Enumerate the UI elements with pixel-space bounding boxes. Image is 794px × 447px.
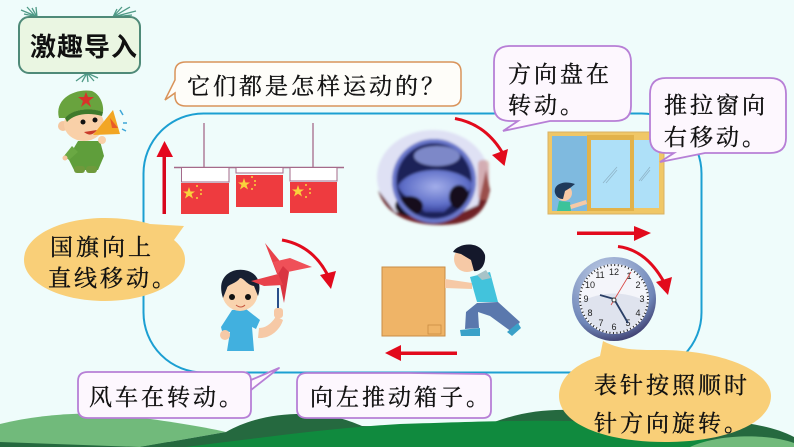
flag middle bbox=[236, 175, 283, 207]
title badge bbox=[19, 7, 140, 82]
speech bubble: clock bbox=[559, 341, 771, 442]
boy at window bbox=[555, 182, 587, 211]
clock: 11 bbox=[595, 270, 605, 280]
speech bubble: clock: 针方向旋转。 bbox=[594, 411, 750, 436]
cardboard box bbox=[382, 267, 445, 336]
arrow: wheel rotation bbox=[455, 118, 508, 166]
clock: 4 bbox=[635, 308, 641, 318]
speech bubble: window bbox=[650, 78, 786, 162]
speech bubble: clock: 表针按照顺时 bbox=[594, 373, 750, 398]
clock: 9 bbox=[583, 294, 589, 304]
title leaves bbox=[21, 7, 136, 82]
clock: 6 bbox=[611, 322, 617, 332]
speech bubble: steering wheel: 方向盘在 bbox=[508, 62, 612, 87]
speech bubble: pinwheel: 风车在转动。 bbox=[89, 385, 245, 410]
steering wheel photo bbox=[377, 130, 490, 225]
clock: 1 bbox=[626, 271, 632, 281]
clock: 5 bbox=[625, 318, 631, 328]
flag right bbox=[290, 182, 337, 213]
clock: 2 bbox=[635, 280, 641, 290]
motion loop frame bbox=[144, 114, 702, 372]
speech bubble: flag: 国旗向上 bbox=[50, 235, 154, 260]
arrow: clock rotation bbox=[618, 246, 672, 295]
speech bubble: box bbox=[297, 373, 492, 418]
title badge: 激趣导入 bbox=[30, 32, 138, 62]
clock bbox=[572, 257, 656, 341]
speech bubble: steering wheel bbox=[494, 46, 631, 131]
clock: 7 bbox=[598, 318, 604, 328]
speech bubble: pinwheel bbox=[78, 368, 279, 418]
clock: 8 bbox=[587, 308, 593, 318]
arrow: box moves left bbox=[385, 345, 457, 361]
speech bubble: flag bbox=[24, 218, 185, 301]
speech bubble: box: 向左推动箱子。 bbox=[310, 385, 492, 410]
clock: 12 bbox=[609, 267, 619, 277]
speech bubble: window: 推拉窗向 bbox=[664, 93, 768, 118]
window with boy bbox=[548, 132, 664, 214]
clock: 3 bbox=[639, 294, 645, 304]
clock: 10 bbox=[585, 280, 595, 290]
arrow: pinwheel rotation bbox=[282, 240, 336, 289]
pinwheel bbox=[251, 243, 312, 303]
speech bubble: flag: 直线移动。 bbox=[48, 266, 178, 291]
speech bubble: question: 它们都是怎样运动的？ bbox=[187, 74, 447, 99]
speech bubble: question bbox=[165, 62, 461, 106]
bottom hills bbox=[0, 410, 794, 447]
icon: soldier with megaphone bbox=[58, 90, 127, 173]
boy pushing box bbox=[445, 244, 521, 336]
speech bubble: steering wheel: 转动。 bbox=[508, 93, 586, 118]
red up arrow bbox=[156, 141, 173, 214]
flags illustration bbox=[156, 123, 344, 214]
boy with pinwheel bbox=[220, 243, 312, 351]
speech bubble: window: 右移动。 bbox=[664, 125, 768, 150]
flag left bbox=[181, 183, 229, 214]
arrow: window moves right bbox=[577, 226, 651, 241]
